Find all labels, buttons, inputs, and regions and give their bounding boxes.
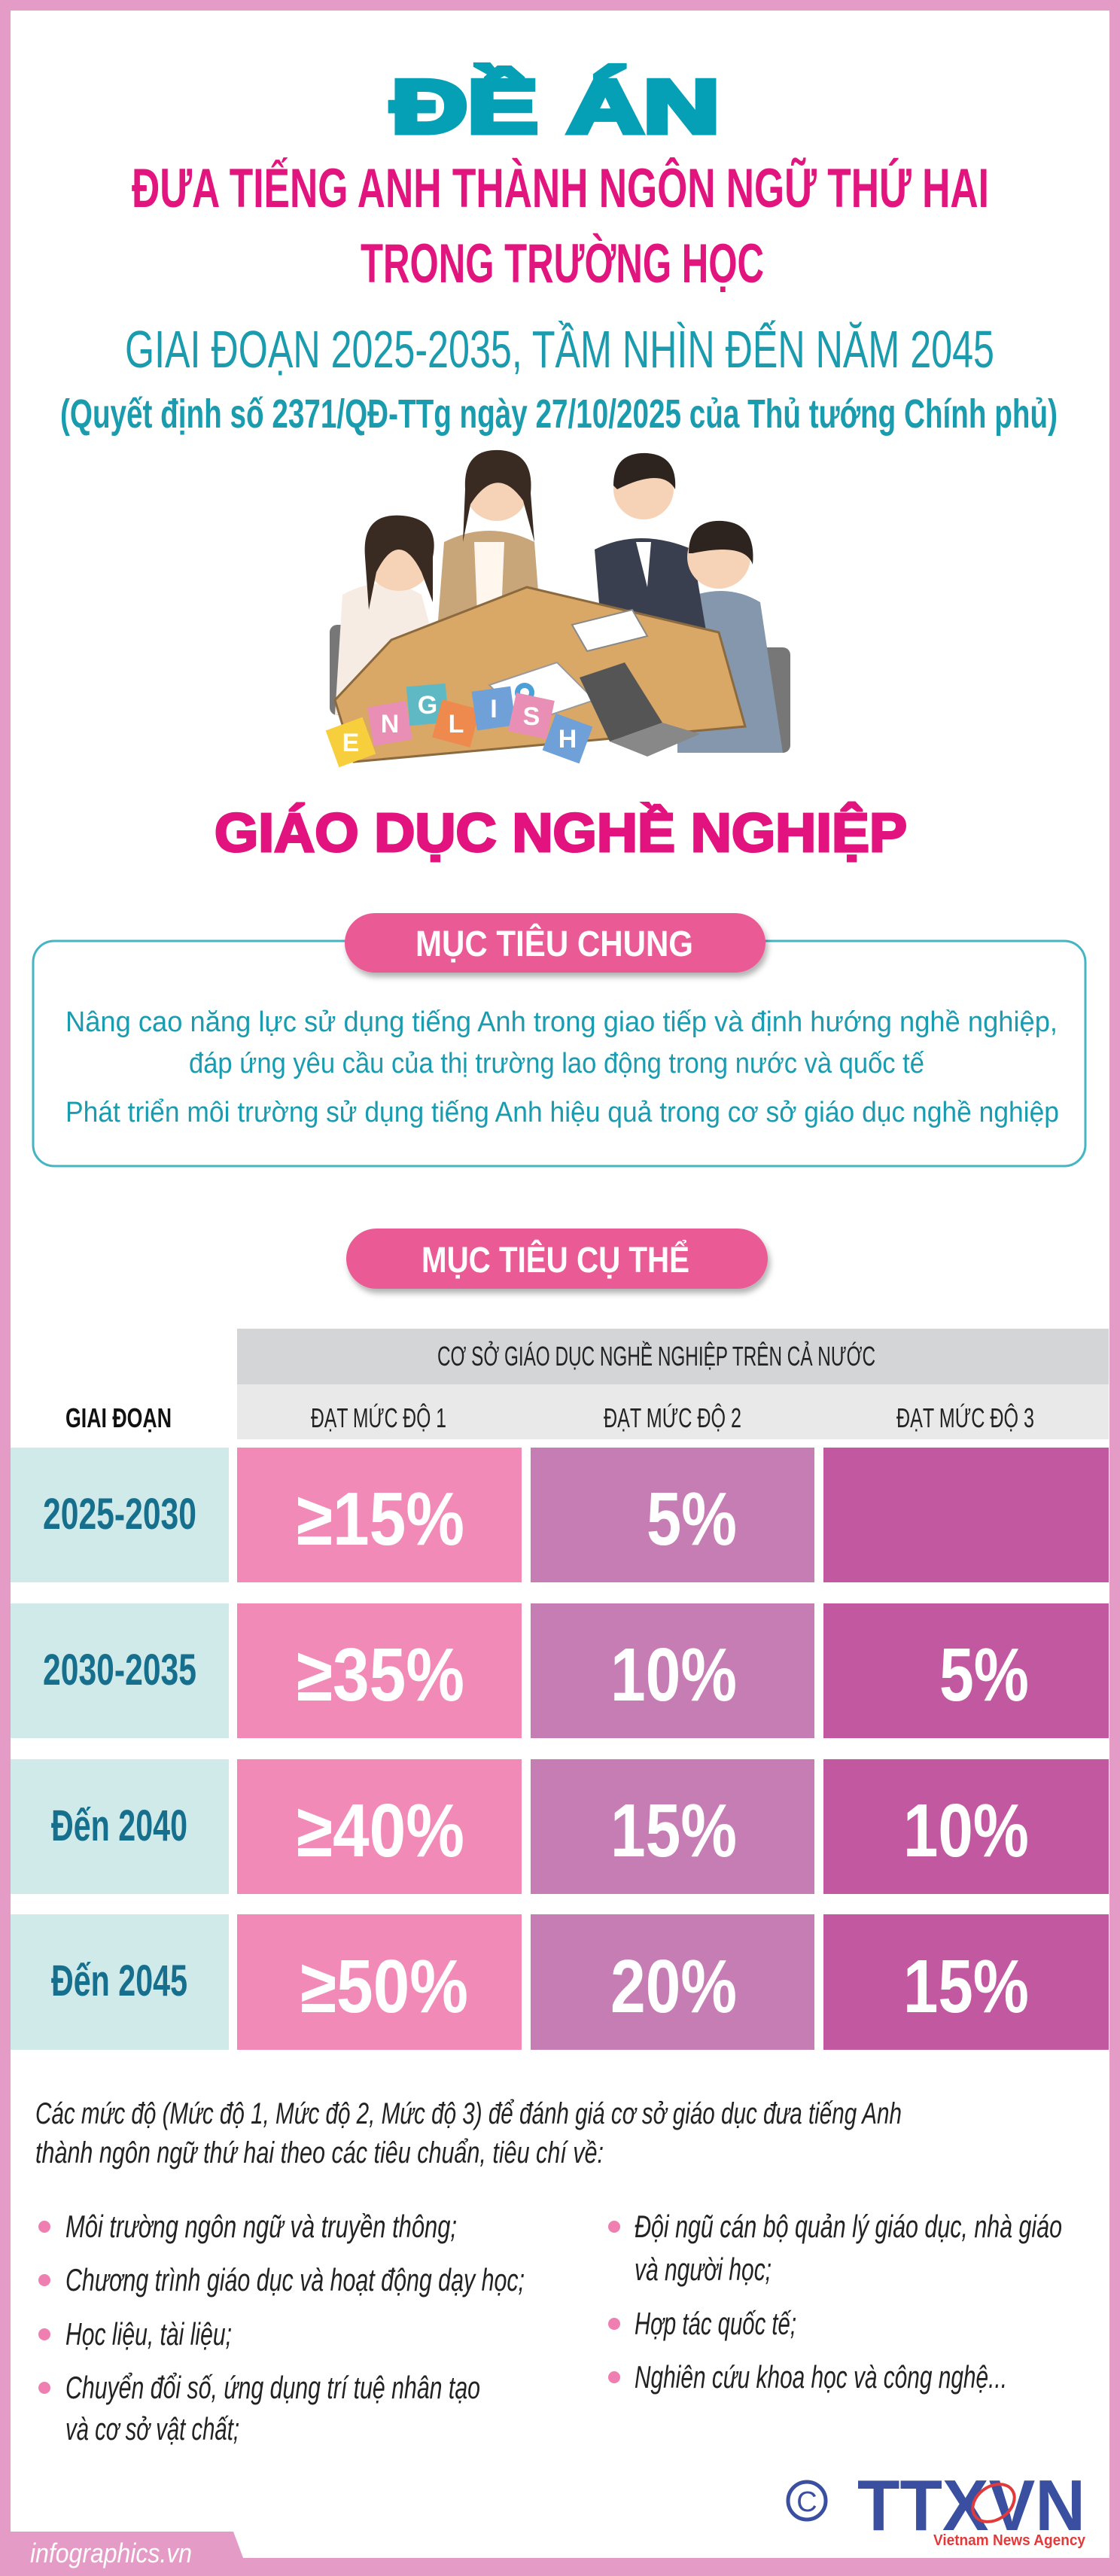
table header: ĐẠT MỨC ĐỘ 1	[311, 1402, 446, 1433]
row Đến 2045: 20%	[610, 1944, 737, 2029]
list: criteria bullets: và người học;	[635, 2252, 772, 2287]
list: criteria bullets: Chuyển đổi số, ứng dụng trí tuệ nhân tạo	[65, 2370, 480, 2405]
list: criteria bullets: Chương trình giáo dục và hoạt động dạy học;	[65, 2262, 525, 2297]
panel: general objective	[33, 941, 1085, 1166]
illustration: meeting group: H	[558, 725, 577, 754]
table header: ĐẠT MỨC ĐỘ 2	[604, 1402, 741, 1433]
row 2025-2030: 5%	[647, 1477, 737, 1561]
text block: criteria intro: thành ngôn ngữ thứ hai theo các tiêu chuẩn, tiêu chí về:	[35, 2136, 604, 2170]
heading: GIÁO DỤC NGHỀ NGHIỆP: GIÁO DỤC NGHỀ NGHIỆP	[215, 802, 907, 863]
row Đến 2045: 15%	[903, 1944, 1029, 2029]
row 2030-2035: 10%	[610, 1633, 737, 1717]
row 2030-2035: 5%	[939, 1633, 1029, 1717]
list: criteria bullets: Môi trường ngôn ngữ và truyền thông;	[65, 2209, 457, 2244]
text: objective lines: Nâng cao năng lực sử dụng tiếng Anh trong giao tiếp và định hướng nghề nghiệp,	[65, 1006, 1058, 1038]
list: criteria bullets	[38, 2209, 1062, 2447]
text: objective lines	[65, 1006, 1059, 1128]
row Đến 2040: Đến 2040	[51, 1801, 187, 1850]
text: objective lines: Phát triển môi trường sử dụng tiếng Anh hiệu quả trong cơ sở giáo dục nghề nghiệp	[65, 1097, 1059, 1128]
row Đến 2040: ≥40%	[297, 1789, 464, 1873]
illustration: meeting group: S	[523, 702, 540, 731]
illustration: meeting group: I	[490, 695, 498, 723]
row 2025-2030: 2025-2030	[43, 1490, 196, 1539]
pill: MỤC TIÊU CỤ THỂ: MỤC TIÊU CỤ THỂ	[422, 1239, 689, 1280]
row Đến 2040	[11, 1759, 1109, 1894]
row Đến 2040: 15%	[610, 1789, 737, 1873]
title: ĐỀ ÁN: ĐỀ ÁN	[391, 65, 720, 149]
row Đến 2045	[11, 1914, 1109, 2050]
illustration: meeting group: E	[342, 729, 359, 757]
row Đến 2045: Đến 2045	[51, 1956, 187, 2005]
table header	[65, 1329, 1109, 1439]
illustration: meeting group: L	[449, 710, 464, 738]
pill: MỤC TIÊU CỤ THỂ	[346, 1229, 768, 1289]
list: criteria bullets: Hợp tác quốc tế;	[635, 2306, 796, 2341]
row 2030-2035	[11, 1603, 1109, 1738]
pill: MỤC TIÊU CHUNG	[345, 913, 765, 973]
text: objective lines: đáp ứng yêu cầu của thị trường lao động trong nước và quốc tế	[189, 1048, 924, 1079]
illustration: meeting group: G	[418, 691, 437, 720]
illustration: meeting group	[326, 450, 790, 767]
illustration: meeting group: N	[381, 710, 399, 738]
logo: TTXVN: Vietnam News Agency	[933, 2532, 1086, 2549]
table header: ĐẠT MỨC ĐỘ 3	[896, 1402, 1034, 1433]
table header: GIAI ĐOẠN	[65, 1402, 172, 1433]
footer tab: infographics.vn: infographics.vn	[30, 2538, 192, 2568]
list: criteria bullets: Học liệu, tài liệu;	[65, 2316, 232, 2352]
row 2025-2030: ≥15%	[297, 1477, 464, 1561]
row Đến 2040: 10%	[903, 1789, 1029, 1873]
row 2025-2030	[11, 1448, 1109, 1582]
row Đến 2045: ≥50%	[300, 1944, 468, 2029]
text block: criteria intro	[35, 2097, 902, 2170]
logo: TTXVN: C	[796, 2486, 817, 2518]
row 2030-2035: 2030-2035	[43, 1646, 196, 1694]
list: criteria bullets: và cơ sở vật chất;	[65, 2411, 239, 2447]
pill: MỤC TIÊU CHUNG: MỤC TIÊU CHUNG	[415, 923, 693, 964]
logo: TTXVN: TTXVN	[857, 2465, 1085, 2546]
row 2030-2035: ≥35%	[297, 1633, 464, 1717]
footer tab: infographics.vn	[0, 2532, 250, 2576]
heading: subtitle line 2: TRONG TRƯỜNG HỌC	[361, 233, 764, 294]
table header: CƠ SỞ GIÁO DỤC NGHỀ NGHIỆP TRÊN CẢ NƯỚC	[437, 1340, 875, 1372]
table: specific targets	[11, 1329, 1109, 2050]
